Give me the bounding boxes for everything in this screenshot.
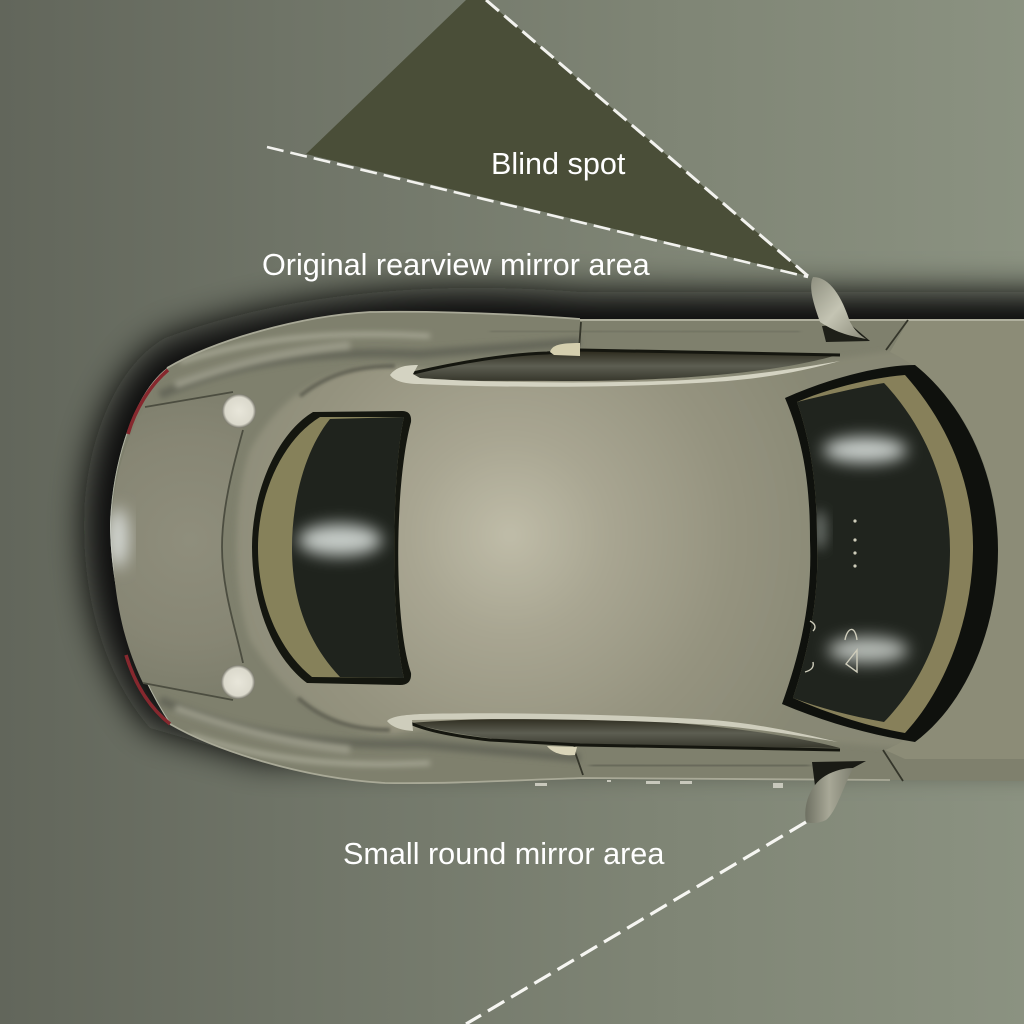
windshield highlights [813, 437, 908, 663]
side mirror top [811, 277, 870, 342]
tail lights [126, 370, 170, 724]
round mirror bottom [221, 665, 255, 699]
car top view [108, 277, 1024, 823]
trunk highlight [108, 508, 128, 568]
trunk lid [112, 392, 243, 700]
side window top [390, 343, 840, 387]
rear window [252, 411, 411, 685]
dashboard details [805, 519, 857, 672]
roof and cabin [236, 354, 910, 744]
trunk seam lines [143, 392, 243, 700]
label: small round mirror area: Small round mirror area [343, 837, 665, 871]
label: original rearview mirror area: Original rearview mirror area [262, 248, 651, 282]
side mirror bottom [805, 761, 866, 823]
car body [110, 312, 1024, 783]
dashed line: small round mirror area edge [466, 822, 806, 1024]
dashed line: blind spot outer edge [486, 0, 808, 276]
car drop shadow [84, 288, 1024, 760]
hood [885, 321, 1024, 759]
door handle bottom [547, 746, 577, 755]
rear glass highlight [298, 524, 382, 556]
body edge highlights [167, 312, 1024, 783]
door handle top [550, 343, 580, 356]
side window bottom [387, 713, 840, 755]
dashed line: rearview mirror area edge [267, 147, 808, 277]
bottom edge specks [535, 780, 783, 788]
hood chrome strip [885, 758, 1024, 762]
round mirror top [222, 394, 256, 428]
label: blind spot: Blind spot [491, 147, 626, 181]
windshield [782, 365, 998, 742]
body shading bands [110, 331, 810, 766]
blind spot area [306, 0, 808, 276]
door cut lines [572, 320, 908, 781]
